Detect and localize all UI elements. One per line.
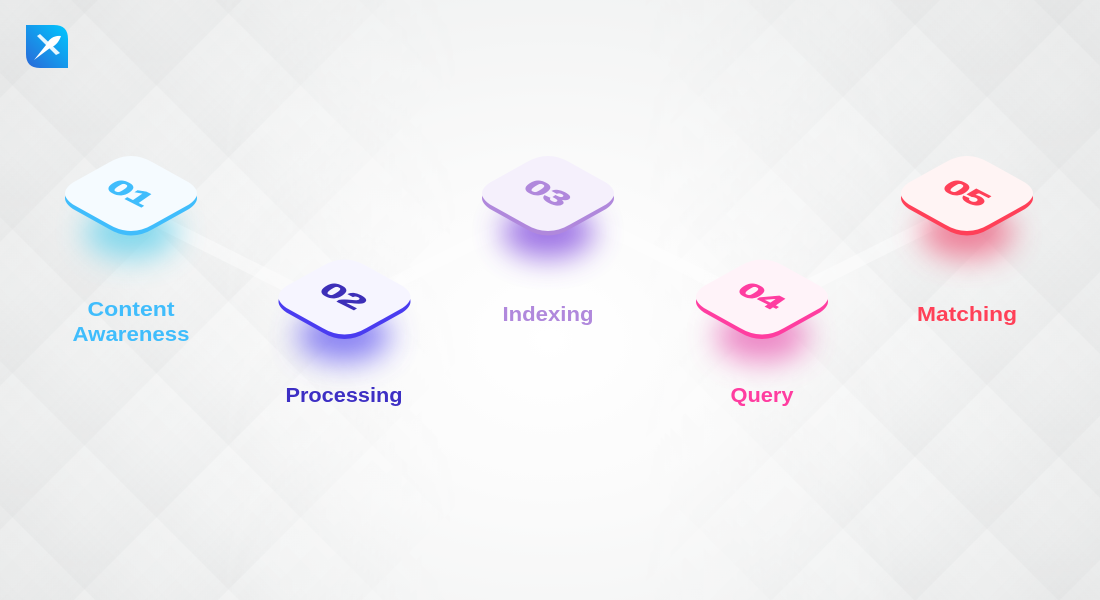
- step 4 label: Query: [730, 385, 794, 407]
- step 1 number: 01: [99, 175, 161, 211]
- step 3 diamond edge: [482, 160, 614, 236]
- step 4: [696, 260, 828, 407]
- step 2 diamond face: [278, 260, 410, 334]
- step 1 diamond edge: [65, 160, 197, 236]
- step 1 label: Awareness: [72, 324, 190, 346]
- step 5 glow: [921, 206, 1013, 258]
- step 3 diamond face: [482, 156, 614, 231]
- logo: [26, 25, 68, 68]
- step 1 diamond face: [65, 156, 197, 231]
- step 4 glow: [716, 310, 808, 362]
- step 2: [278, 260, 410, 407]
- step 3 number: 03: [516, 175, 578, 211]
- step 1 glow: [85, 206, 177, 258]
- step 5 diamond edge: [901, 160, 1033, 236]
- step 5 label: Matching: [917, 304, 1017, 326]
- step 5 diamond face: [901, 156, 1033, 231]
- step 1: [65, 156, 197, 346]
- step 4 diamond edge: [696, 264, 828, 339]
- step 3: [482, 156, 614, 326]
- step 2 label: Processing: [286, 385, 402, 407]
- step 4 number: 04: [730, 278, 793, 315]
- step 2 number: 02: [312, 278, 374, 314]
- step 2 glow: [298, 310, 390, 362]
- step 3 label: Indexing: [502, 304, 594, 326]
- step 5: [901, 156, 1033, 326]
- step 1 label: Content: [88, 299, 175, 321]
- connectors between steps: [160, 220, 930, 292]
- step 2 diamond edge: [278, 264, 410, 339]
- step 5 number: 05: [935, 175, 997, 211]
- step 3 glow: [502, 206, 594, 258]
- step 4 diamond face: [696, 260, 828, 334]
